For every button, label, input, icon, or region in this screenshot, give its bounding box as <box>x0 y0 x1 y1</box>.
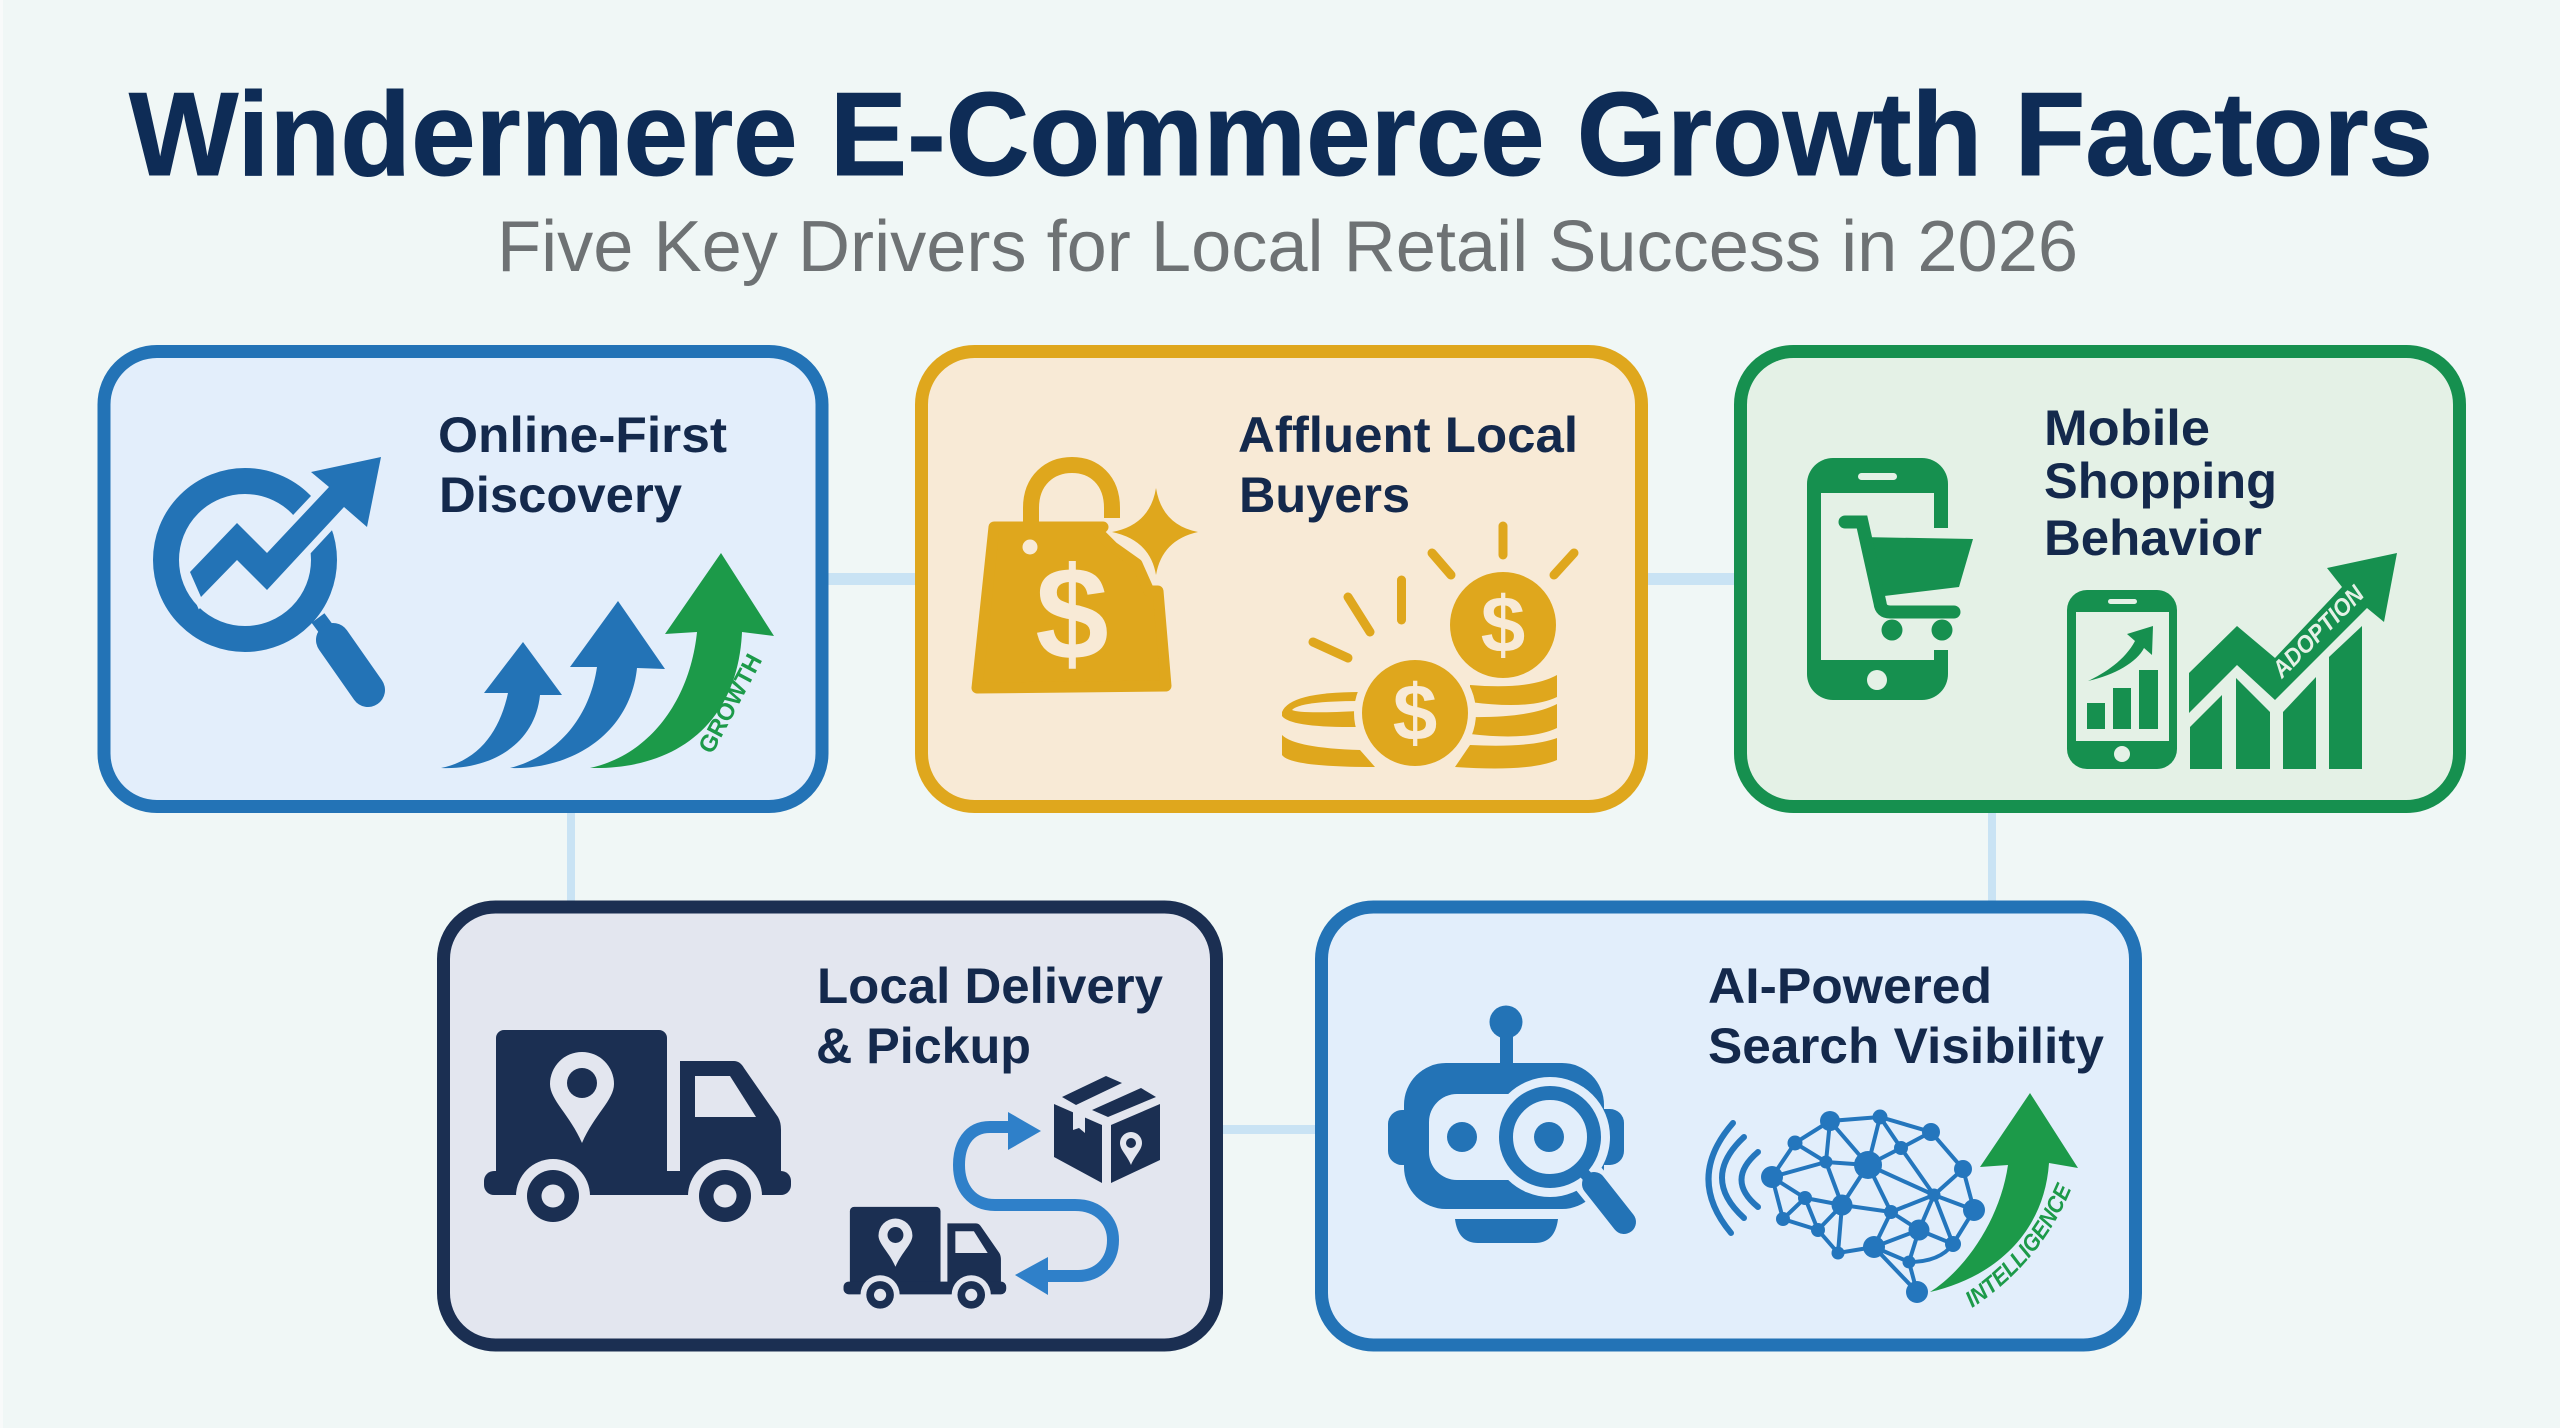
icon: three growth arrows: GROWTH <box>693 650 768 758</box>
icon: small truck <box>844 1207 1006 1309</box>
heading: online-first discovery <box>438 407 727 523</box>
heading: mobile shopping behavior <box>2044 400 2277 566</box>
icon: coin stacks with rays: $ <box>1481 580 1525 669</box>
heading: local delivery and pickup <box>816 958 1163 1074</box>
heading: ai-powered search visibility: AI-Powered <box>1708 958 1992 1014</box>
icon: coin stacks with rays: $ <box>1393 668 1437 757</box>
icon: signal waves <box>1708 1123 1758 1233</box>
icon: magnifier with trend arrow <box>166 457 381 690</box>
panel: online-first discovery <box>104 352 822 806</box>
arrow: s-shaped delivery route <box>959 1112 1113 1295</box>
heading: mobile shopping behavior: Shopping <box>2044 453 2277 509</box>
heading: mobile shopping behavior: Mobile <box>2044 400 2210 456</box>
icon: phone with bar chart and adoption arrow <box>2067 553 2397 769</box>
heading: affluent local buyers <box>1238 407 1578 523</box>
icon: intelligence growth arrow: INTELLIGENCE <box>1966 1182 2071 1308</box>
panel: mobile shopping behavior <box>1740 352 2460 806</box>
heading: ai-powered search visibility: Search Visibility <box>1708 1018 2104 1074</box>
heading: local delivery and pickup: & Pickup <box>816 1018 1031 1074</box>
title: Windermere E-Commerce Growth Factors <box>129 68 2433 201</box>
panel: ai-powered search visibility <box>1315 900 2142 1352</box>
icon: delivery truck with pin <box>484 1030 791 1222</box>
panel: affluent local buyers <box>922 352 1642 806</box>
icon: shopping bag with sparkle: $ <box>1035 540 1109 687</box>
heading: ai-powered search visibility <box>1708 958 2104 1074</box>
connectors between panels <box>567 573 1996 1134</box>
heading: affluent local buyers: Buyers <box>1239 467 1410 523</box>
icon: coin stacks with rays <box>1282 526 1574 774</box>
icon: three growth arrows <box>441 553 774 768</box>
panel: local delivery and pickup <box>444 907 1216 1345</box>
icon: phone with shopping cart <box>1807 458 1973 700</box>
icon: robot with magnifier <box>1388 1006 1624 1243</box>
icon: phone with bar chart and adoption arrow: ADOPTION <box>2266 580 2370 684</box>
heading: online-first discovery: Discovery <box>439 467 682 523</box>
heading: online-first discovery: Online-First <box>438 407 727 463</box>
subtitle: Five Key Drivers for Local Retail Success in 2026 <box>497 207 2078 287</box>
heading: affluent local buyers: Affluent Local <box>1238 407 1578 463</box>
heading: local delivery and pickup: Local Delivery <box>817 958 1163 1014</box>
icon: parcel box with pin <box>1054 1076 1160 1183</box>
icon: intelligence growth arrow <box>1930 1093 2078 1308</box>
icon: shopping bag with sparkle <box>977 465 1198 688</box>
icon: neural network brain <box>1761 1110 1985 1303</box>
heading: mobile shopping behavior: Behavior <box>2044 510 2262 566</box>
